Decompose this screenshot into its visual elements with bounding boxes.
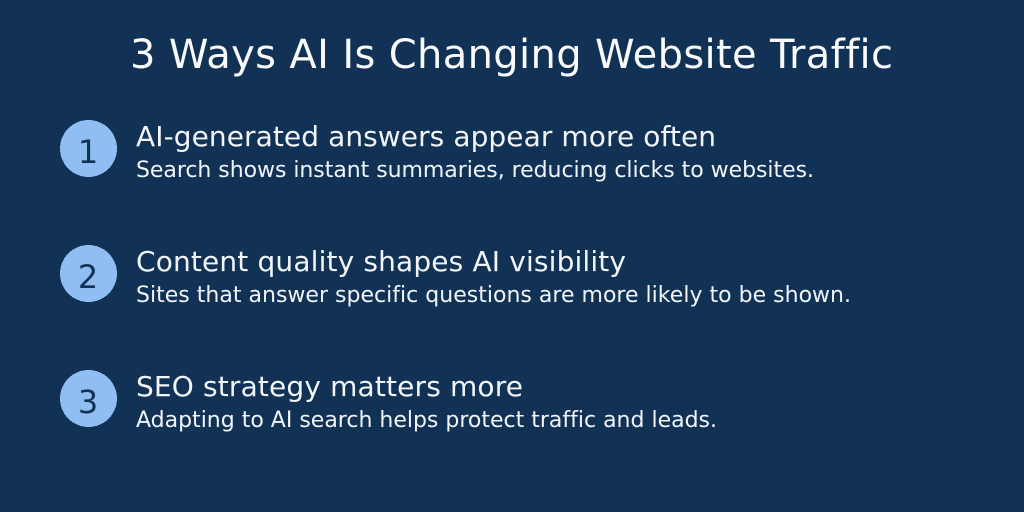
- title: 3 Ways AI Is Changing Website Traffic: [130, 32, 893, 78]
- item 3 description: Adapting to AI search helps protect traffic and leads.: [136, 408, 717, 433]
- item 2 description: Sites that answer specific questions are more likely to be shown.: [136, 283, 851, 308]
- item 1: [60, 120, 814, 183]
- number badge 3: [60, 370, 117, 427]
- number badge 2: [60, 245, 117, 302]
- item 1 description: Search shows instant summaries, reducing clicks to websites.: [136, 158, 814, 183]
- number badge 1: [60, 120, 117, 177]
- number badge 3: 3: [78, 383, 98, 421]
- number badge 1: 1: [78, 133, 98, 171]
- number badge 2: 2: [78, 258, 98, 296]
- item 3 heading: SEO strategy matters more: [136, 370, 523, 403]
- item 2: [60, 245, 851, 308]
- item 2 heading: Content quality shapes AI visibility: [136, 245, 626, 278]
- item 1 heading: AI-generated answers appear more often: [136, 120, 716, 153]
- item 3: [60, 370, 717, 433]
